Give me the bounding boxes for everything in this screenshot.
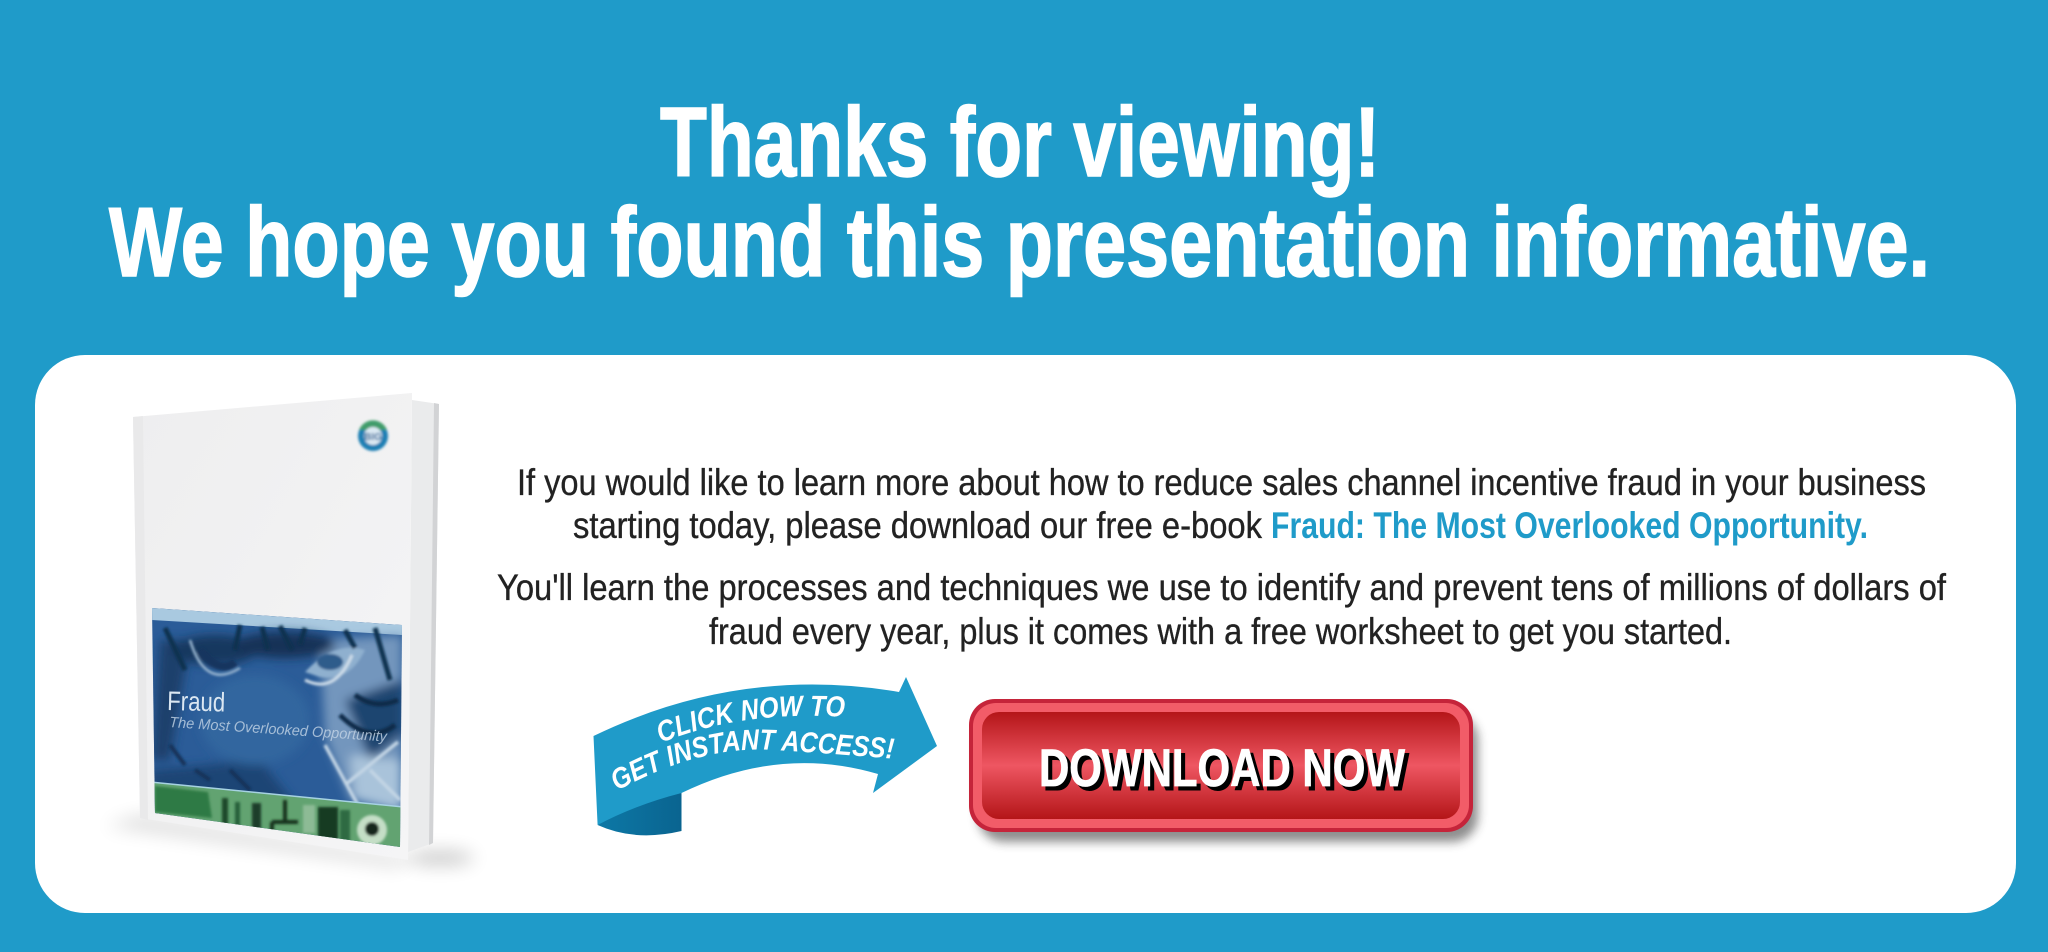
text block: details: fraud every year, plus it comes with a free worksheet to get you started. [709, 611, 1732, 652]
ribbon fold [598, 770, 682, 835]
title: Thanks for viewing! [660, 87, 1380, 197]
button label: DOWNLOAD NOW [1043, 743, 1409, 802]
book mockup: The Most Overlooked Opportunity [169, 714, 389, 746]
cover text: Fraud [167, 686, 226, 718]
ribbon text: GET INSTANT ACCESS! [612, 729, 895, 788]
green strip [150, 782, 404, 850]
ribbon text [612, 696, 895, 788]
ebook title link: Fraud: The Most Overlooked Opportunity. [1271, 505, 1868, 546]
text block: intro: starting today, please download our free e-book [573, 505, 1262, 546]
cover photo: tiger [152, 608, 402, 847]
logo [358, 420, 388, 451]
download button [969, 699, 1478, 842]
book pages [408, 400, 439, 852]
title [109, 87, 1930, 297]
button body [969, 699, 1473, 832]
book cover [133, 393, 412, 860]
download button: DOWNLOAD NOW [1039, 739, 1405, 798]
ribbon text: CLICK NOW TO [658, 696, 845, 741]
text block: details [497, 567, 1947, 652]
panel: white card [35, 355, 2016, 913]
book mockup [105, 393, 474, 868]
ribbon arrow [594, 677, 937, 825]
book shadow [105, 815, 408, 868]
text block: intro [517, 462, 1926, 546]
button shadow [978, 714, 1478, 842]
logo: BIG [364, 432, 382, 443]
arrow ribbon callout [594, 677, 937, 836]
